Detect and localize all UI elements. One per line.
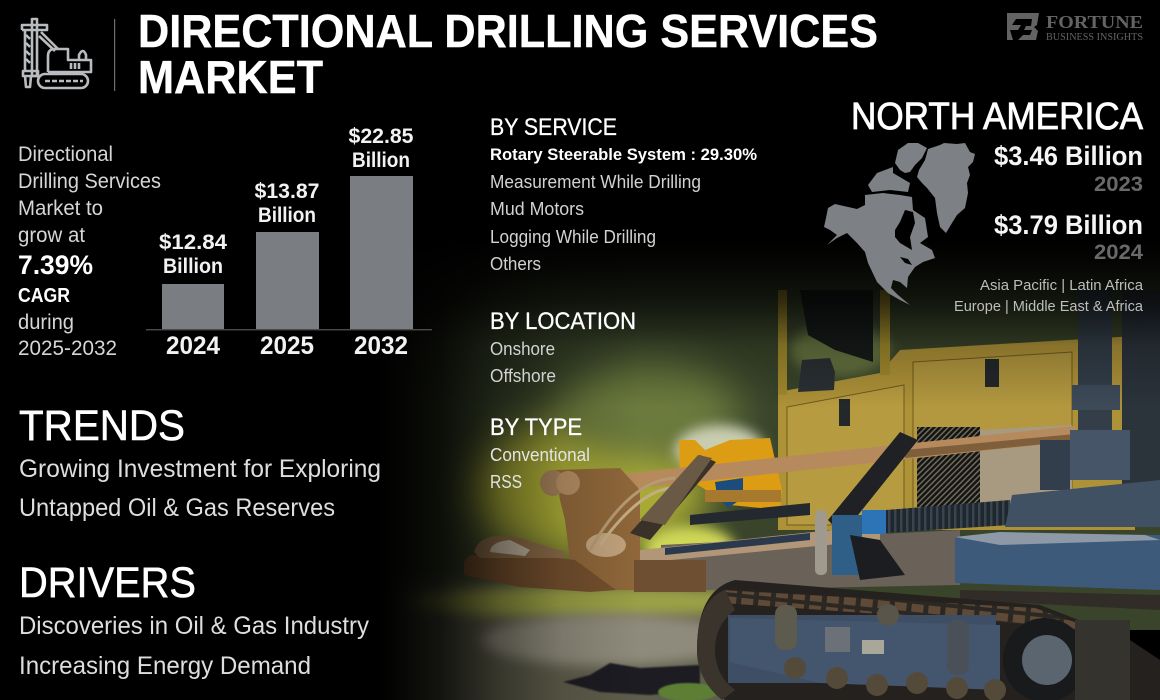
dark left fade <box>380 0 640 700</box>
trends: Untapped Oil & Gas Reserves <box>19 494 335 522</box>
segment: by type <box>490 414 590 492</box>
bar value labels: Billion <box>163 255 223 278</box>
CAGR text block: Market to <box>18 197 103 220</box>
segment: by service: Others <box>490 253 541 274</box>
segment: by location: Onshore <box>490 338 555 359</box>
regional values: 2024 <box>1094 241 1143 264</box>
segment: by service: Measurement While Drilling <box>490 171 701 192</box>
CAGR text block: grow at <box>18 224 85 247</box>
drill arm <box>630 455 716 540</box>
logo: Fortune Business Insights: FORTUNE <box>1046 12 1143 32</box>
header divider <box>114 19 115 91</box>
drivers: Discoveries in Oil & Gas Industry <box>19 612 369 640</box>
segment: by service: Mud Motors <box>490 198 584 219</box>
segment: by location <box>490 308 636 386</box>
bar value labels: Billion <box>352 149 410 172</box>
bar value labels: $13.87 <box>254 180 320 203</box>
other regions: Europe | Middle East & Africa <box>954 299 1144 315</box>
logo: Fortune Business Insights: BUSINESS INSIGHTS <box>1046 32 1143 43</box>
segment: by service: Rotary Steerable System : 29.30% <box>490 146 757 164</box>
photo background: ground <box>380 570 800 700</box>
bar value labels: $12.84 <box>159 231 227 254</box>
segment: by type: BY TYPE <box>490 414 582 441</box>
regional heading: NORTH AMERICA <box>851 96 1144 138</box>
title: DIRECTIONAL DRILLING SERVICES <box>138 5 878 57</box>
CAGR text block: Directional <box>18 143 113 166</box>
drivers <box>19 559 369 680</box>
crawler track <box>697 580 1160 700</box>
lower frame <box>634 503 960 592</box>
photo: drilling rig on site <box>380 230 1160 700</box>
CAGR text block: CAGR <box>18 285 70 307</box>
logo: Fortune Business Insights <box>1007 12 1143 43</box>
year labels <box>166 332 408 360</box>
regional values <box>994 141 1143 264</box>
CAGR text block <box>18 143 161 360</box>
trends: TRENDS <box>19 402 185 450</box>
photo background: foliage <box>380 230 1160 630</box>
bar 2024 <box>162 284 224 329</box>
trends: Growing Investment for Exploring <box>19 455 381 483</box>
front arm and blue motor <box>815 432 918 580</box>
CAGR text block: 7.39% <box>18 250 93 280</box>
bar value labels: Billion <box>258 204 316 227</box>
drivers: Increasing Energy Demand <box>19 652 311 680</box>
year labels: 2024 <box>166 332 220 360</box>
segment: by type: Conventional <box>490 444 590 465</box>
icon: drilling rig <box>22 19 91 88</box>
CAGR text block: 2025-2032 <box>18 337 117 360</box>
gear rack <box>886 500 1010 533</box>
CAGR text block: Drilling Services <box>18 170 161 193</box>
segment: by type: RSS <box>490 471 522 492</box>
title <box>138 5 878 103</box>
year labels: 2025 <box>260 332 314 360</box>
bar value labels <box>159 125 414 278</box>
chart baseline <box>146 329 432 330</box>
bar chart <box>146 125 432 360</box>
map: North America <box>824 143 975 305</box>
blue tower <box>1005 290 1160 527</box>
other regions: Asia Pacific | Latin Africa <box>980 278 1144 294</box>
Greenland <box>917 143 975 233</box>
bar 2025 <box>256 232 319 329</box>
year labels: 2032 <box>354 332 408 360</box>
dark top fade <box>380 0 1160 480</box>
Arctic islands <box>895 143 927 173</box>
segment: by location: BY LOCATION <box>490 308 636 335</box>
blue box <box>955 532 1160 610</box>
trends <box>19 402 381 522</box>
title: MARKET <box>138 51 323 103</box>
bar 2032 <box>350 176 413 329</box>
segment: by location: Offshore <box>490 365 556 386</box>
CAGR text block: during <box>18 311 74 334</box>
mainland <box>824 193 935 305</box>
segment: by service <box>490 114 757 274</box>
upper drill pipe <box>621 426 1075 490</box>
other regions <box>954 278 1144 315</box>
regional values: $3.46 Billion <box>994 141 1143 171</box>
regional values: 2023 <box>1094 173 1143 196</box>
drivers: DRIVERS <box>19 559 196 607</box>
yellow bracket and blue bag <box>679 438 782 510</box>
segment: by service: Logging While Drilling <box>490 226 656 247</box>
regional values: $3.79 Billion <box>994 210 1143 240</box>
bar value labels: $22.85 <box>348 125 414 148</box>
logo mark <box>1007 13 1039 40</box>
drill head <box>464 468 675 592</box>
yellow machine body <box>778 290 1135 530</box>
segment: by service: BY SERVICE <box>490 114 617 141</box>
